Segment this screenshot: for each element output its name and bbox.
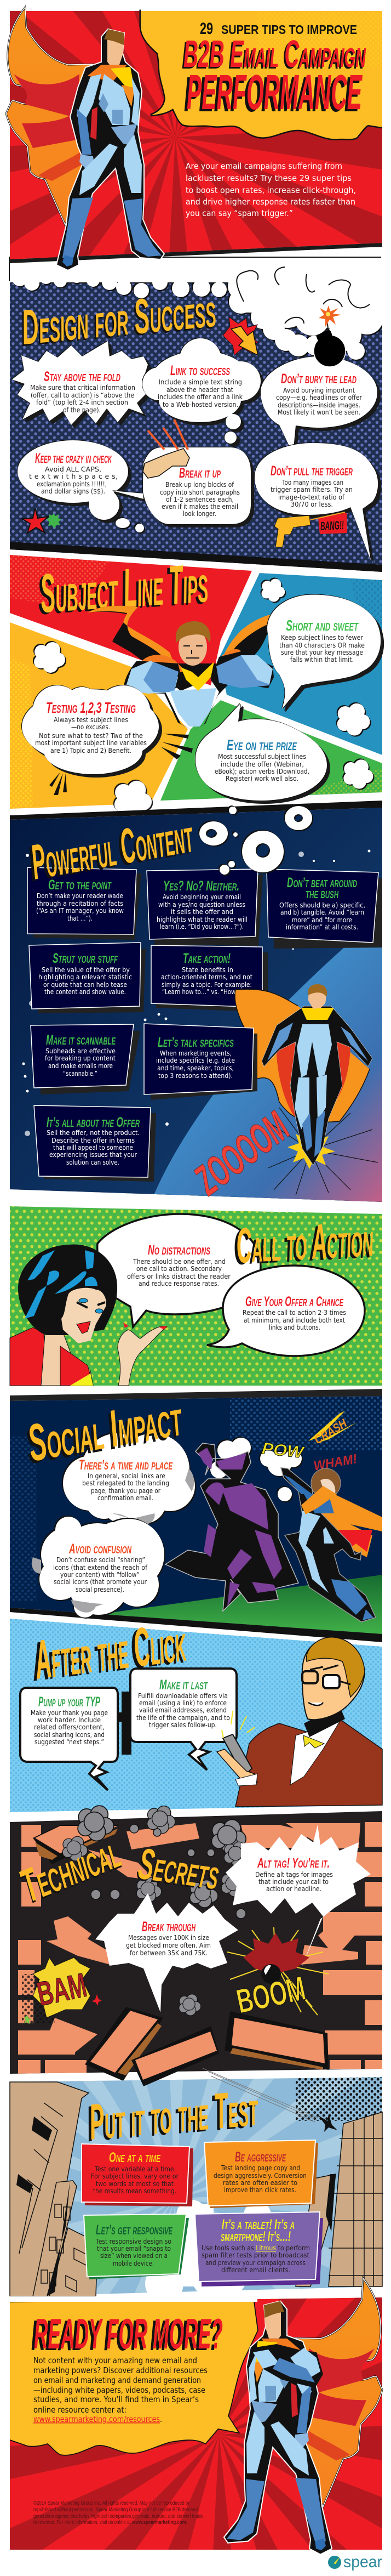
red sunburst background [10,2297,382,2572]
bubble: avoid confusion: icons (that extend the reach of [53,1563,148,1571]
card: make it scannable: “scannable.” [63,1069,97,1077]
card: one at a time [82,2144,193,2206]
bubble: stay above the fold: of the page). [63,406,101,414]
bubble: don't pull the trigger [255,443,378,560]
icon: star and green burst [22,508,61,533]
bubble: don't pull the trigger: 30/70 or less. [291,500,333,508]
card: it's a tablet: different email clients. [221,2266,290,2274]
card: let's talk specifics: top 3 reasons to attend). [158,1071,233,1080]
bubble: no distractions [97,1214,261,1327]
copyright text: to revenue. For more information, visit us online at www.spearmarketing.com. [33,2519,187,2526]
card: be aggressive: rates are often easier to [223,2178,297,2187]
cloud ink strokes [237,267,370,324]
heading: Put it to the Test [84,2080,261,2152]
bubble: stay above the fold: Stay above the fold [44,369,120,384]
bubble: short and sweet: sure that your key message [281,648,363,656]
bubble: don't bury the lead: Most likely it won’t be seen. [278,408,360,416]
bubble: testing 1,2,3 testing: most important subject line variables [35,739,147,747]
bubble: link to success: to a Web-hosted version. [163,400,238,408]
card: it's a tablet: spam filter tests prior to broadcast [202,2251,309,2259]
panel: powerful content [10,801,382,1217]
closing paragraph: Not content with your amazing new email and [33,2356,197,2365]
bubble: short and sweet: falls within that limit. [290,655,354,663]
bubble: no distractions: one call to action. Secondary [136,1264,222,1273]
CRASH sound effect: CRASH [312,1416,349,1447]
bubble: stay above the fold: (offer, call to action) is “above the [31,391,134,399]
airplane and contrail [203,2068,337,2132]
logo: spear: spear [343,2553,382,2571]
card: make it scannable [31,1024,140,1094]
card: take action: action-oriented terms, and not [161,973,252,981]
white clouds along the top [10,258,383,360]
card: make it scannable: Subheads are effective [45,1047,116,1055]
bubble: pump up your TYP: social sharing icons, and [34,1730,105,1739]
card: it's all about the offer: It’s all about the Offer [47,1115,140,1130]
navy background and green ground [10,1396,382,1639]
heading: Technical Secrets: Secrets [134,1840,221,1900]
yellow panel [10,622,188,809]
card: let's get responsive: Test responsive design so [95,2237,171,2245]
card: take action: Take action! [183,951,231,966]
logo: spear [328,2553,382,2571]
card: it's a tablet: smartphone! It’s…! [221,2229,291,2244]
card: don't beat around the bush [267,869,382,949]
card: let's talk specifics: include specifics (e.g. date [156,1056,235,1064]
bubble: break it up [112,447,251,524]
intro paragraph: you can say “spam trigger.” [186,208,293,218]
bubble: make it last [130,1669,237,1770]
icon: red burst with yellow arrow [223,317,258,355]
bubble: eye on the prize: Most successful subject lines [218,752,306,761]
panel: put it to the test [10,2026,383,2322]
card: be aggressive: improve than click rates. [224,2186,296,2194]
intro paragraph [186,161,356,218]
card: don't beat around the bush: Offers should be a) specific, [279,901,365,909]
bubble: there's a time and place: page, thank you page or [91,1486,161,1495]
bubble: short and sweet: Keep subject lines to fewer [281,633,364,642]
bubble: break through: get blocked more often. Aim [126,1941,211,1949]
panel: call to action [10,1206,382,1386]
closing paragraph: marketing powers? Discover additional resources [33,2365,208,2375]
bubble: pump up your TYP [20,1688,134,1790]
illustration: flying superhero [88,606,308,730]
illustration: standing superhero [6,7,164,270]
bubble: make it last: Make it last [159,1677,208,1693]
card: get to the point: Get to the point [48,877,112,893]
impact cloud [210,1438,302,1501]
illustration: kicking hero [281,1468,382,1622]
bubble: make it last: trigger sales follow-up. [149,1721,217,1729]
card: take action: simply as a topic. For example: [162,980,252,989]
card: get to the point [27,867,141,940]
bubble: avoid confusion: Don’t confuse social “sharing” [56,1556,145,1564]
copyright text: republished without permission. Spear Marketing Group is a full-service B2B demand [33,2506,198,2513]
bubble: keep the crazy in check: exclamation points !!!!!!, [37,480,107,488]
bubble: alt tag you're it: action or headline. [266,1885,321,1893]
bubble: keep the crazy in check: Avoid ALL CAPS, [45,465,101,473]
icon: bomb with spark [314,305,346,367]
halftone in bubble [257,13,382,68]
panel: social impact [10,1388,382,1642]
card: it's all about the offer: solution can solve. [66,1158,119,1166]
heading: Design for Success [18,282,219,357]
bubble: break it up: even if it makes the email [162,502,238,510]
bubble: break it up: look longer. [183,509,216,518]
ZOOOOM sound effect: ZOOOOM [185,1102,298,1204]
card: get to the point: that …”). [67,914,93,922]
card: let's talk specifics [144,1024,257,1100]
bubble: link to success: Link to success [170,363,230,378]
cover cloud overflow outside panel [382,252,391,362]
heading: Technical Secrets: Technical [13,1828,127,1914]
cloud behind cards [145,2200,271,2303]
heading: Subject Line Tips [36,552,210,626]
bubble: link to success [142,338,261,444]
BAM burst: BAM [34,1966,90,2013]
panel: subject line tips [10,552,382,818]
bubble: alt tag you're it: that include your call to [258,1877,329,1886]
copyright text: ©2014 Spear Marketing Group Inc. All rights reserved. May not be reproduced or [33,2500,189,2506]
yellow speech bubble [141,11,382,139]
bubble: pump up your TYP: suggested “next steps.” [34,1738,104,1746]
bubble: no distractions: and reduce response rates. [139,1279,219,1287]
bubble: break it up: of 1-2 sentences each, [166,495,234,503]
black wall with bricks [10,1809,382,2078]
intro paragraph: and drive higher response rates faster than [186,197,355,207]
card: it's all about the offer: Sell the offer, not the product. [47,1128,140,1137]
card: one at a time: the results mean something. [93,2187,176,2195]
card: strut your stuff [29,943,146,1013]
action lines [49,734,193,795]
bubble: no distractions: No distractions [148,1242,210,1258]
card: yes no neither: it sells the offer and [171,907,233,916]
bubble: testing 1,2,3 testing: Not sure what to test? Two of the [39,731,143,740]
card: let's get responsive: mobile device. [113,2259,154,2267]
copyright text [33,2500,203,2526]
bubble: there's a time and place: confirmation email. [97,1494,153,1502]
bubble: stay above the fold: Make sure that critical information [30,383,135,391]
sky with rays and halftone [32,2077,382,2294]
card: it's all about the offer: Describe the offer in terms [51,1136,135,1144]
card: take action: State benefits in [182,966,233,974]
bubble: avoid confusion: social presence). [76,1585,124,1593]
POW sound effect: POW [261,1439,306,1462]
heading: Powerful Content [25,808,198,892]
bubble: break through: for between 35K and 75K. [130,1949,208,1957]
bubble: keep the crazy in check: t e x t w i t h s p a c e s, [29,472,118,480]
heading: Ready for more [31,2310,223,2359]
card: strut your stuff: Strut your stuff [53,951,118,966]
bubble: testing 1,2,3 testing: —no excuses. [71,723,110,731]
closing paragraph: studies, and more. You’ll find them in Spear’s [33,2395,199,2404]
card: it's a tablet: Use tools such as Litmus to perform [202,2244,310,2252]
closing paragraph: online resource center at: [33,2405,127,2415]
bubble: keep the crazy in check: and dollar signs ($$). [41,487,105,495]
green panel [160,700,382,801]
bubble: make it last: email (using a link) to enforce [139,1699,227,1707]
bubble: don't bury the lead: Avoid burying important [283,386,355,394]
bubble: alt tag you're it: Define alt tags for images [255,1870,333,1879]
icon: BANG flag [311,512,347,534]
icon: BANG flag: BANG!! [320,518,344,533]
BOOM burst with bomb [227,1927,329,2021]
card: be aggressive: Test landing page copy and [221,2164,300,2172]
card: strut your stuff: the content and show value. [44,988,126,996]
card: let's get responsive: Let’s get responsive [96,2222,173,2238]
icon: hand with scratches [143,419,189,478]
bubble: there's a time and place: In general, social links are [88,1472,165,1480]
card: it's a tablet: and preview your campaign across [205,2259,306,2267]
card: don't beat around the bush: and b) tangible. Avoid “learn [280,908,364,916]
bubble: avoid confusion: your content) with “follow” [60,1570,140,1579]
card: yes no neither: Avoid beginning your email [163,893,241,901]
illustration: man with phone [217,1637,382,1807]
BOOM burst with bomb: BOOM [233,1970,309,2021]
card: yes no neither: highlights what the reader will [157,915,248,923]
bubble: give your offer a chance [207,1266,365,1356]
card: yes no neither: with a yes/no question unless [158,900,245,909]
bubble: break through: Messages over 100K in size [128,1933,209,1942]
card: one at a time: One at a time [109,2150,161,2165]
bottom black edge [10,1608,382,1642]
bubble: don't bury the lead [261,356,377,454]
card: get to the point: (“As an IT manager, you know [36,906,124,915]
card: be aggressive: design aggressively. Conversion [214,2171,307,2180]
heading: Social Impact [21,1388,188,1475]
card: make it scannable: and make emails more [48,1062,113,1070]
red sunburst background [10,0,382,274]
bubble: break through: Break through [142,1919,196,1934]
bubble: pump up your TYP: Pump up your TYP [38,1694,100,1710]
brick overlapping sky [131,2026,219,2086]
illustration: hero flying over planet [235,984,378,1195]
bubble: there's a time and place: best relegated to the landing [82,1479,169,1487]
closing paragraph [33,2356,208,2424]
heading: Social Impact: Social Impact [24,1388,187,1473]
bubble: link to success: Include a simple text string [159,378,242,386]
heading: After the Click [27,1611,191,1693]
card: yes no neither [147,869,263,946]
smoke puffs [34,579,373,818]
grey smoke [62,1806,249,2016]
card: let's talk specifics: Let’s talk specifics [158,1035,234,1050]
bubble: testing 1,2,3 testing: Always test subject lines [54,716,128,724]
card: get to the point: Don’t make your reader wade [37,892,123,900]
black top edge [10,801,382,820]
bubble: avoid confusion [32,1517,164,1618]
bubble: give your offer a chance: at minimum, and include both text [244,1316,345,1324]
heading: Social Impact: Social Impact [21,1391,185,1475]
illustration: hero with crossed arms [224,2278,382,2555]
panel: hero header [6,0,391,274]
bubble: avoid confusion: Avoid confusion [68,1541,132,1557]
bubble: make it last: the life of the campaign, and to [136,1713,230,1722]
bubble: don't bury the lead: copy—e.g. headlines or offer [276,393,363,401]
bubble: break through [95,1893,238,2012]
card: it's a tablet [195,2212,323,2286]
bubble: break it up: Break up long blocks of [165,480,234,489]
bubble: make it last: valid email addresses, extend [139,1706,227,1714]
bubble: don't pull the trigger: Too many images can [281,478,343,486]
title [182,20,366,122]
bubble: break it up: Break it up [179,466,221,481]
title: SUPER TIPS TO IMPROVE [221,22,357,37]
panel: ready for more [0,2278,382,2572]
heading: Technical Secrets: Secrets [136,1839,222,1898]
bubble: don't bury the lead: descriptions—inside images. [278,401,360,409]
bubble: testing 1,2,3 testing: are 1) Topic and 2) Benefit. [50,746,131,754]
illustration: purple villain [165,1443,298,1611]
card: take action: “Learn how to…” vs. “How to…” [162,988,251,996]
panel: after the click [10,1611,382,1812]
illustration: woman pointing [10,1245,167,1386]
bubble: no distractions: offers or links distract the reader [127,1272,231,1280]
bubble: avoid confusion: social icons (that promote your [54,1578,147,1586]
bubble: pump up your TYP: related offers/content, [34,1723,105,1731]
bubble: link to success: includes the offer and a link [158,393,243,401]
intro paragraph: lackluster results? Try these 29 super tips [186,173,352,183]
closing paragraph: www.spearmarketing.com/resources. [33,2414,162,2424]
card: let's talk specifics: and time, speaker, topics, [157,1064,234,1072]
card: be aggressive [204,2140,318,2208]
panel: design for success [10,252,391,581]
intro paragraph: to boost open rates, increase click-through, [186,185,356,195]
bubble: eye on the prize: eBook); action verbs (Download, [215,767,309,775]
card: let's get responsive [84,2214,189,2279]
red panel [10,555,252,685]
flying brick [33,1825,119,1864]
card: don't beat around the bush: the bush [306,886,339,901]
card: strut your stuff: Sell the value of the offer by [42,966,130,974]
yellow speech bubble [10,2297,257,2455]
bubble: keep the crazy in check: Keep the crazy in check [35,451,112,466]
bubble: give your offer a chance: Repeat the call to action 2-3 times [243,1308,346,1317]
bubble: testing 1,2,3 testing: Testing 1,2,3 Testing [46,699,136,716]
bubble: short and sweet: than 40 characters OR make [279,641,365,649]
card: don't beat around the bush: more” and “for more [292,916,352,924]
card: it's all about the offer [34,1105,156,1182]
bubble: alt tag you're it: Alt tag! You’re it. [257,1856,330,1871]
bottom black edge [10,243,382,263]
bubble: testing 1,2,3 testing [22,685,159,774]
icon: yellow gun [274,515,311,547]
bubble: no distractions: There should be one offer, and [133,1257,226,1266]
bubble: short and sweet [267,595,381,709]
card: it's a tablet: It’s a tablet! It’s a [222,2217,295,2232]
bubble: don't pull the trigger: image-to-text ratio of [278,493,345,501]
closing paragraph: on email and marketing and demand generation [33,2375,201,2385]
bubble: link to success: above the header that [166,385,233,394]
blue dotted background [10,1619,382,1812]
blue panel [219,573,382,755]
intro paragraph: Are your email campaigns suffering from [186,161,342,171]
heading: Technical Secrets: Technical [14,1826,128,1913]
night sky and planet [10,801,382,1217]
card: be aggressive: Be aggressive [235,2149,286,2165]
card: one at a time: Test one variable at a time. [94,2165,176,2173]
explosion rings [199,806,312,875]
card: strut your stuff: highlighting a relevant statistic [38,973,132,981]
bottom bricks [85,2007,329,2081]
card: let's get responsive: that your email “snaps to [97,2244,171,2252]
bubble: there's a time and place: There’s a time and place [79,1457,173,1473]
bubble: give your offer a chance: links and buttons. [269,1323,320,1331]
card: yes no neither: learn (i.e. “Did you know…?”). [160,922,244,930]
bubble: break it up: copy into short paragraphs [160,488,240,496]
card: yes no neither: Yes? No? Neither. [163,878,239,894]
bubble: alt tag you're it [226,1825,371,1968]
bubble: eye on the prize: Eye on the prize [227,736,297,753]
card: let's talk specifics: When marketing events, [160,1049,232,1057]
card: let's get responsive: size” when viewed on a [100,2251,168,2260]
dotted navy background [10,274,382,581]
panel: technical secrets [10,1806,382,2081]
bubble: stay above the fold: fold” (top left 2-4 inch section [36,398,128,406]
BAM burst [22,1957,102,2024]
green dotted background [10,1206,382,1386]
WHAM sound effect: WHAM! [313,1451,358,1474]
card: don't beat around the bush: information” at all costs. [286,923,358,931]
card: make it scannable: for breaking up content [45,1054,116,1062]
bubble: stay above the fold [12,341,148,425]
black top edge [10,1389,382,1401]
bubble: eye on the prize: include the offer (Webinar, [221,760,304,768]
card: strut your stuff: or quote that can help tease [43,980,127,989]
thought dots [116,518,144,532]
title: 29 [200,20,213,38]
card: it's all about the offer: that will appeal to someone [53,1143,133,1151]
bubble: there's a time and place [63,1433,195,1525]
bubble: don't pull the trigger: trigger spam filters. Try an [271,485,353,493]
card: get to the point: through a recitation of facts [37,899,123,907]
card: one at a time: two words at most so that [96,2180,174,2188]
card: take action [151,945,268,1012]
closing paragraph: —including white papers, videos, podcasts, case [33,2385,205,2395]
bubble: eye on the prize: Register) work well also. [226,774,298,782]
bubble: make it last: Fulfill downloadable offers via [138,1692,228,1700]
bubble: eye on the prize [196,703,327,801]
card: make it scannable: Make it scannable [46,1032,116,1048]
card: one at a time: For subject lines, vary one or [91,2172,179,2180]
card: it's all about the offer: experiencing issues that your [49,1150,137,1159]
bubble: pump up your TYP: work harder. Include [38,1716,101,1724]
energy burst [263,1108,378,1195]
bubble: pump up your TYP: Make your thank you page [31,1709,108,1717]
copyright text: generation agency that helps high-tech companies generate, nurture, and convert leads [33,2513,203,2520]
buildings [10,2082,383,2296]
bubble: keep the crazy in check [18,440,128,520]
